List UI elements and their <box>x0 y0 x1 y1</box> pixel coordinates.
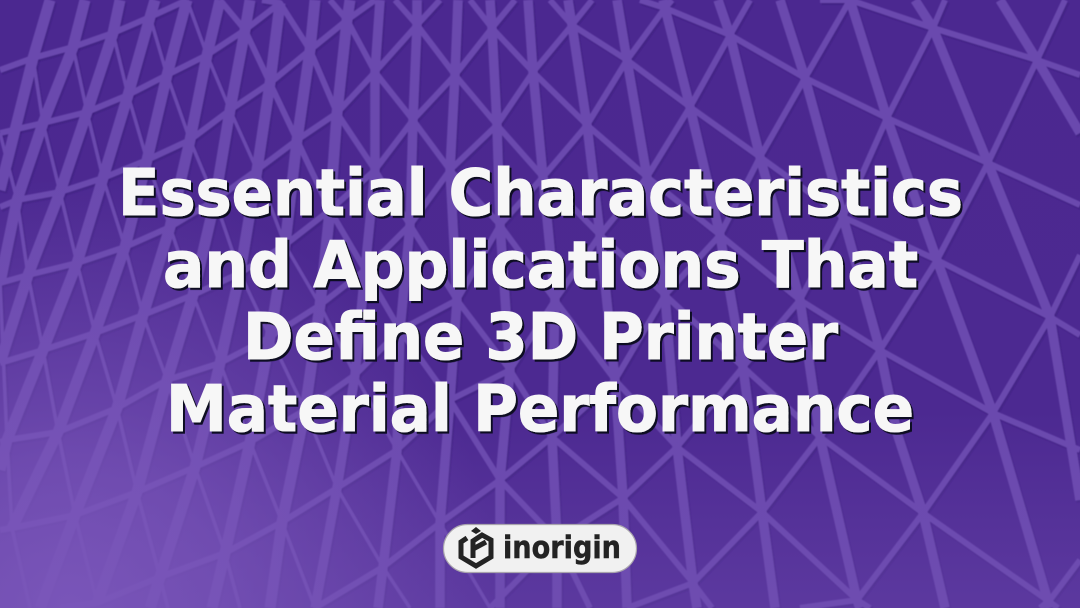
icon: inorigin cube mark <box>461 527 491 566</box>
title: and Applications That <box>163 229 918 303</box>
title: Define 3D Printer <box>243 301 838 375</box>
title <box>118 157 963 447</box>
logo badge <box>444 524 636 572</box>
title: Essential Characteristics <box>118 157 963 231</box>
logo wordmark: inorigin <box>503 530 621 566</box>
title: Material Performance <box>166 373 914 447</box>
logo pill background <box>444 524 636 572</box>
